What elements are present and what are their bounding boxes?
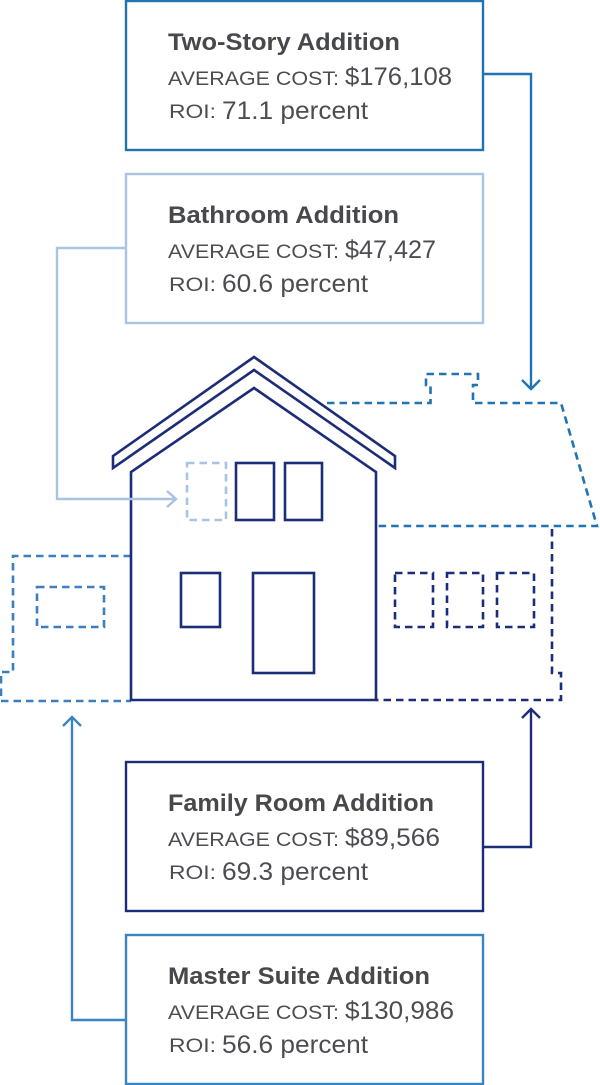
panel: two-story addition: Two-Story Addition (168, 29, 400, 56)
panel: bathroom addition: $47,427 (345, 236, 436, 264)
bathroom addition window (187, 463, 226, 520)
panel: master suite addition: Master Suite Addition (168, 963, 430, 990)
panel: master suite addition (126, 935, 483, 1084)
panel: master suite addition: 56.6 percent (222, 1031, 368, 1059)
panel: bathroom addition: ROI: (169, 275, 216, 296)
panel: family room addition: ROI: (169, 863, 216, 884)
panel: family room addition: $89,566 (345, 824, 440, 852)
panel: family room addition: Family Room Addition (168, 790, 434, 817)
panel: bathroom addition: 60.6 percent (222, 270, 368, 298)
panel: two-story addition: 71.1 percent (222, 97, 368, 125)
panel: family room addition: AVERAGE COST: (168, 830, 339, 851)
panel: bathroom addition (126, 174, 483, 323)
panel: two-story addition (126, 1, 483, 150)
arrow: family room addition (483, 709, 540, 847)
panel: family room addition: 69.3 percent (222, 858, 368, 886)
two-story addition outline (327, 374, 597, 526)
panel: two-story addition: $176,108 (345, 63, 452, 91)
arrow: bathroom addition (57, 248, 176, 507)
panel: bathroom addition: AVERAGE COST: (168, 242, 339, 263)
panel: two-story addition: ROI: (169, 102, 216, 123)
main house (113, 357, 395, 700)
panel: family room addition (126, 762, 483, 911)
panel: two-story addition: AVERAGE COST: (168, 69, 339, 90)
panel: master suite addition: AVERAGE COST: (168, 1003, 339, 1024)
arrow: two-story addition (483, 74, 540, 389)
master suite addition outline (1, 556, 131, 701)
arrow: master suite addition (63, 717, 126, 1020)
family room addition outline (376, 529, 561, 700)
panel: master suite addition: ROI: (169, 1036, 216, 1057)
panel: bathroom addition: Bathroom Addition (168, 202, 399, 229)
house illustration (1, 357, 597, 701)
panel: master suite addition: $130,986 (345, 997, 454, 1025)
